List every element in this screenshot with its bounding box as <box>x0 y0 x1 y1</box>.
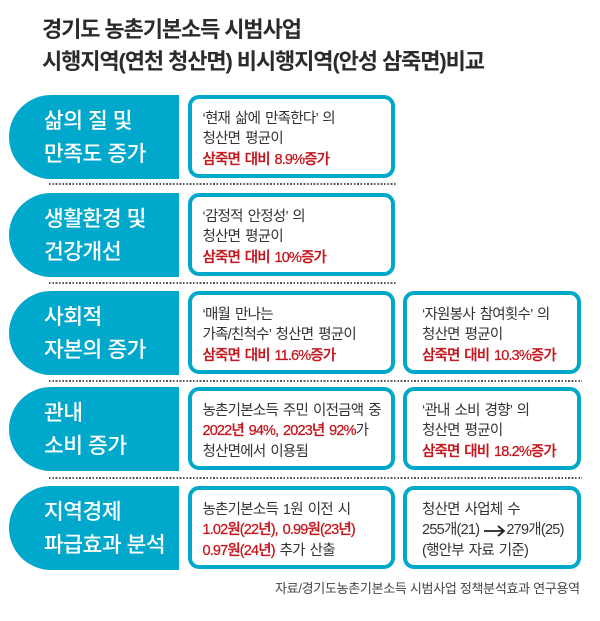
row 3 label <box>9 291 179 375</box>
row 5 card right: 255개(21) 279개(25) <box>422 522 564 538</box>
row 5 label <box>9 486 179 570</box>
row 1 card: 삼죽면 대비 8.9%증가 <box>202 152 329 168</box>
row 3 card right <box>403 291 581 374</box>
row 3 card left <box>188 291 395 374</box>
row 5 card right <box>403 486 581 569</box>
row 3 label: 사회적 <box>44 304 102 328</box>
row 3 card left: 가족/친척수’ 청산면 평균이 <box>202 327 356 343</box>
row 1 card <box>188 95 395 178</box>
title <box>42 17 484 74</box>
title: 시행지역(연천 청산면) 비시행지역(안성 삼죽면)비교 <box>42 49 484 74</box>
row 3 card right: 청산면 평균이 <box>422 327 502 343</box>
row 3 card right: 삼죽면 대비 10.3%증가 <box>422 348 556 364</box>
row 4 card right <box>403 387 581 470</box>
row 5 label: 파급효과 분석 <box>44 532 165 556</box>
row 1 card: ‘현재 삶에 만족한다’ 의 <box>202 111 335 127</box>
row 3 card left: ‘매월 만나는 <box>202 307 273 323</box>
row 5 card left: 0.97원(24년) 추가 산출 <box>202 542 335 558</box>
row 4 card left <box>188 387 395 470</box>
row 5 label: 지역경제 <box>44 500 121 524</box>
row 2 card: 삼죽면 대비 10%증가 <box>202 250 326 266</box>
row 4 label: 소비 증가 <box>44 434 127 458</box>
row 1 card: 청산면 평균이 <box>202 131 283 147</box>
row 5 card right: 청산면 사업체 수 <box>422 502 520 518</box>
row 4 card right: ‘관내 소비 경향’ 의 <box>422 403 529 419</box>
row 5 card left <box>188 486 395 569</box>
row 4 card right: 삼죽면 대비 18.2%증가 <box>422 444 556 460</box>
row 2 card: 청산면 평균이 <box>202 229 283 245</box>
row 1 label <box>9 95 179 179</box>
row 2 label: 생활환경 및 <box>44 206 146 230</box>
row 2 label <box>9 193 179 277</box>
row 2 card: ‘감정적 안정성’ 의 <box>202 209 305 225</box>
row 5 card left: 1.02원(22년), 0.99원(23년) <box>202 522 355 538</box>
row 1 label: 삶의 질 및 <box>44 108 132 132</box>
row 4 card left: 2022년 94%, 2023년 92%가 <box>202 423 368 439</box>
row 3 card right: ‘자원봉사 참여횟수’ 의 <box>422 307 549 323</box>
row 4 card left: 농촌기본소득 주민 이전금액 중 <box>202 403 381 419</box>
row 4 label <box>9 387 179 471</box>
title: 경기도 농촌기본소득 시범사업 <box>42 17 301 42</box>
row 3 label: 자본의 증가 <box>44 338 146 362</box>
row 1 label: 만족도 증가 <box>44 142 146 166</box>
row 2 label: 건강개선 <box>44 240 121 264</box>
row 4 label: 관내 <box>44 400 83 424</box>
row 5 card right: (행안부 자료 기준) <box>422 542 528 558</box>
row 5 card left: 농촌기본소득 1원 이전 시 <box>202 502 350 518</box>
row 4 card left: 청산면에서 이용됨 <box>202 444 308 460</box>
row 4 card right: 청산면 평균이 <box>422 423 502 439</box>
icon: arrow <box>484 525 506 537</box>
row 2 card <box>188 193 395 276</box>
row 3 card left: 삼죽면 대비 11.6%증가 <box>202 348 335 364</box>
source note: 자료/경기도농촌기본소득 시범사업 정책분석효과 연구용역 <box>275 581 580 596</box>
